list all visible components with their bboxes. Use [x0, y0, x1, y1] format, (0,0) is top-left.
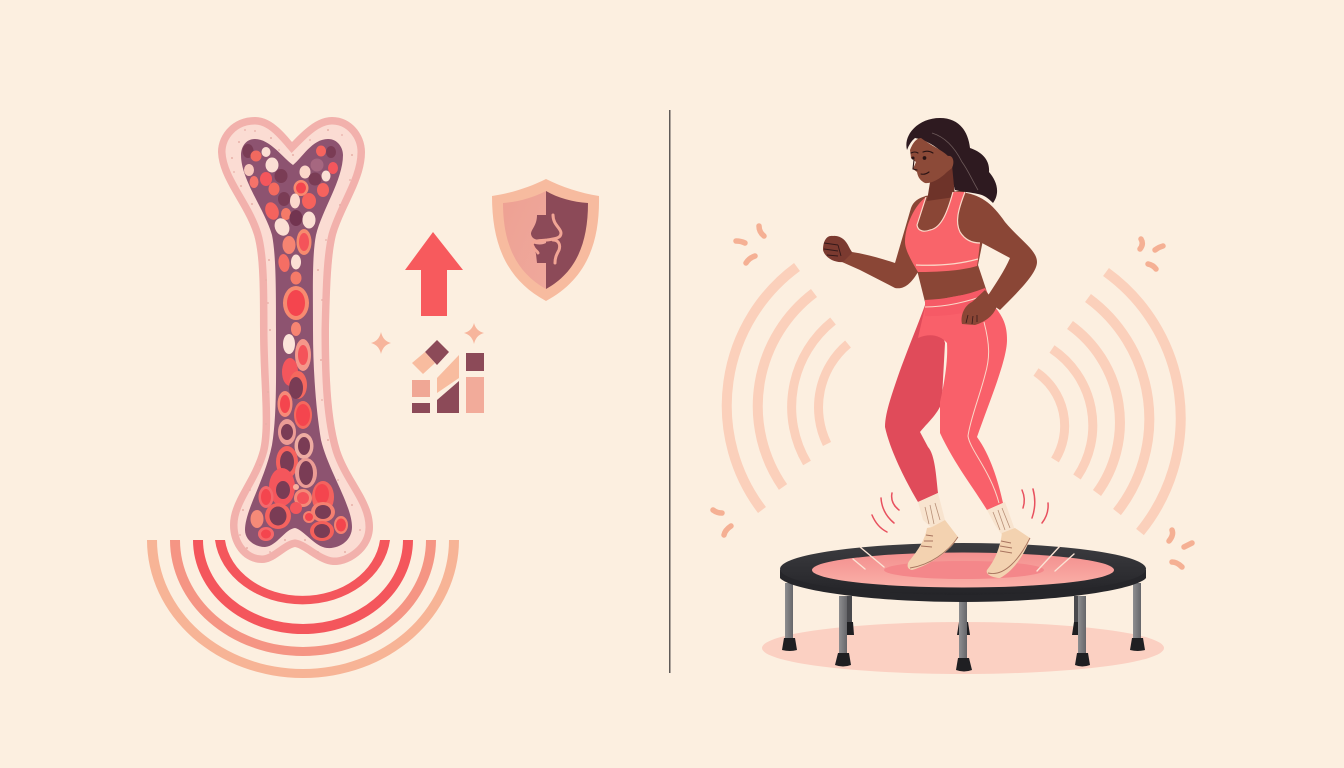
back legs	[846, 596, 1079, 635]
shield rim	[492, 179, 599, 301]
icon: shield with joint	[492, 179, 599, 301]
face details	[911, 151, 933, 174]
sports bra	[905, 192, 980, 272]
dark leg	[885, 305, 945, 502]
mat contact spot	[884, 561, 1044, 579]
panel divider	[669, 110, 670, 673]
bone speckles	[231, 129, 361, 553]
icon: rising density blocks	[412, 340, 484, 413]
right vibration waves	[1036, 272, 1181, 532]
waistband	[925, 288, 995, 316]
bone marrow cavity	[241, 139, 352, 548]
joint glyph	[531, 215, 561, 263]
bra piping	[916, 192, 980, 265]
front arm	[960, 192, 1037, 310]
right sock	[987, 502, 1015, 535]
woman jumping	[823, 118, 1048, 578]
hand on hip	[962, 290, 997, 325]
motion dashes	[713, 226, 1192, 567]
chest and midriff	[905, 190, 987, 302]
illustration: bone health and trampoline exercise	[147, 110, 1195, 678]
legging piping	[925, 294, 999, 503]
trampoline shadow	[762, 622, 1164, 674]
marrow cells	[242, 144, 348, 541]
frame rim	[780, 570, 1146, 602]
bone wall layers	[218, 117, 373, 565]
right shoe	[987, 528, 1030, 578]
bone cross-section	[218, 117, 373, 565]
icon: up arrow	[405, 232, 463, 316]
front leg and hips	[918, 292, 1007, 510]
left sock	[918, 493, 945, 528]
shield left half	[503, 191, 546, 289]
hair	[906, 118, 997, 203]
face	[910, 138, 953, 183]
jump mat	[812, 552, 1114, 588]
icon: sparkles	[371, 323, 484, 354]
foot motion lines	[872, 489, 1048, 532]
back arm and fist	[823, 196, 927, 288]
neck	[927, 165, 955, 201]
left shoe	[908, 520, 958, 570]
mat tension lines	[853, 546, 1074, 571]
trampoline	[780, 543, 1146, 672]
left vibration waves	[727, 267, 848, 510]
concentric vibration arcs under bone	[147, 540, 459, 678]
front legs	[782, 583, 1145, 672]
hair highlight strand	[932, 133, 978, 190]
shield right half	[546, 191, 588, 289]
